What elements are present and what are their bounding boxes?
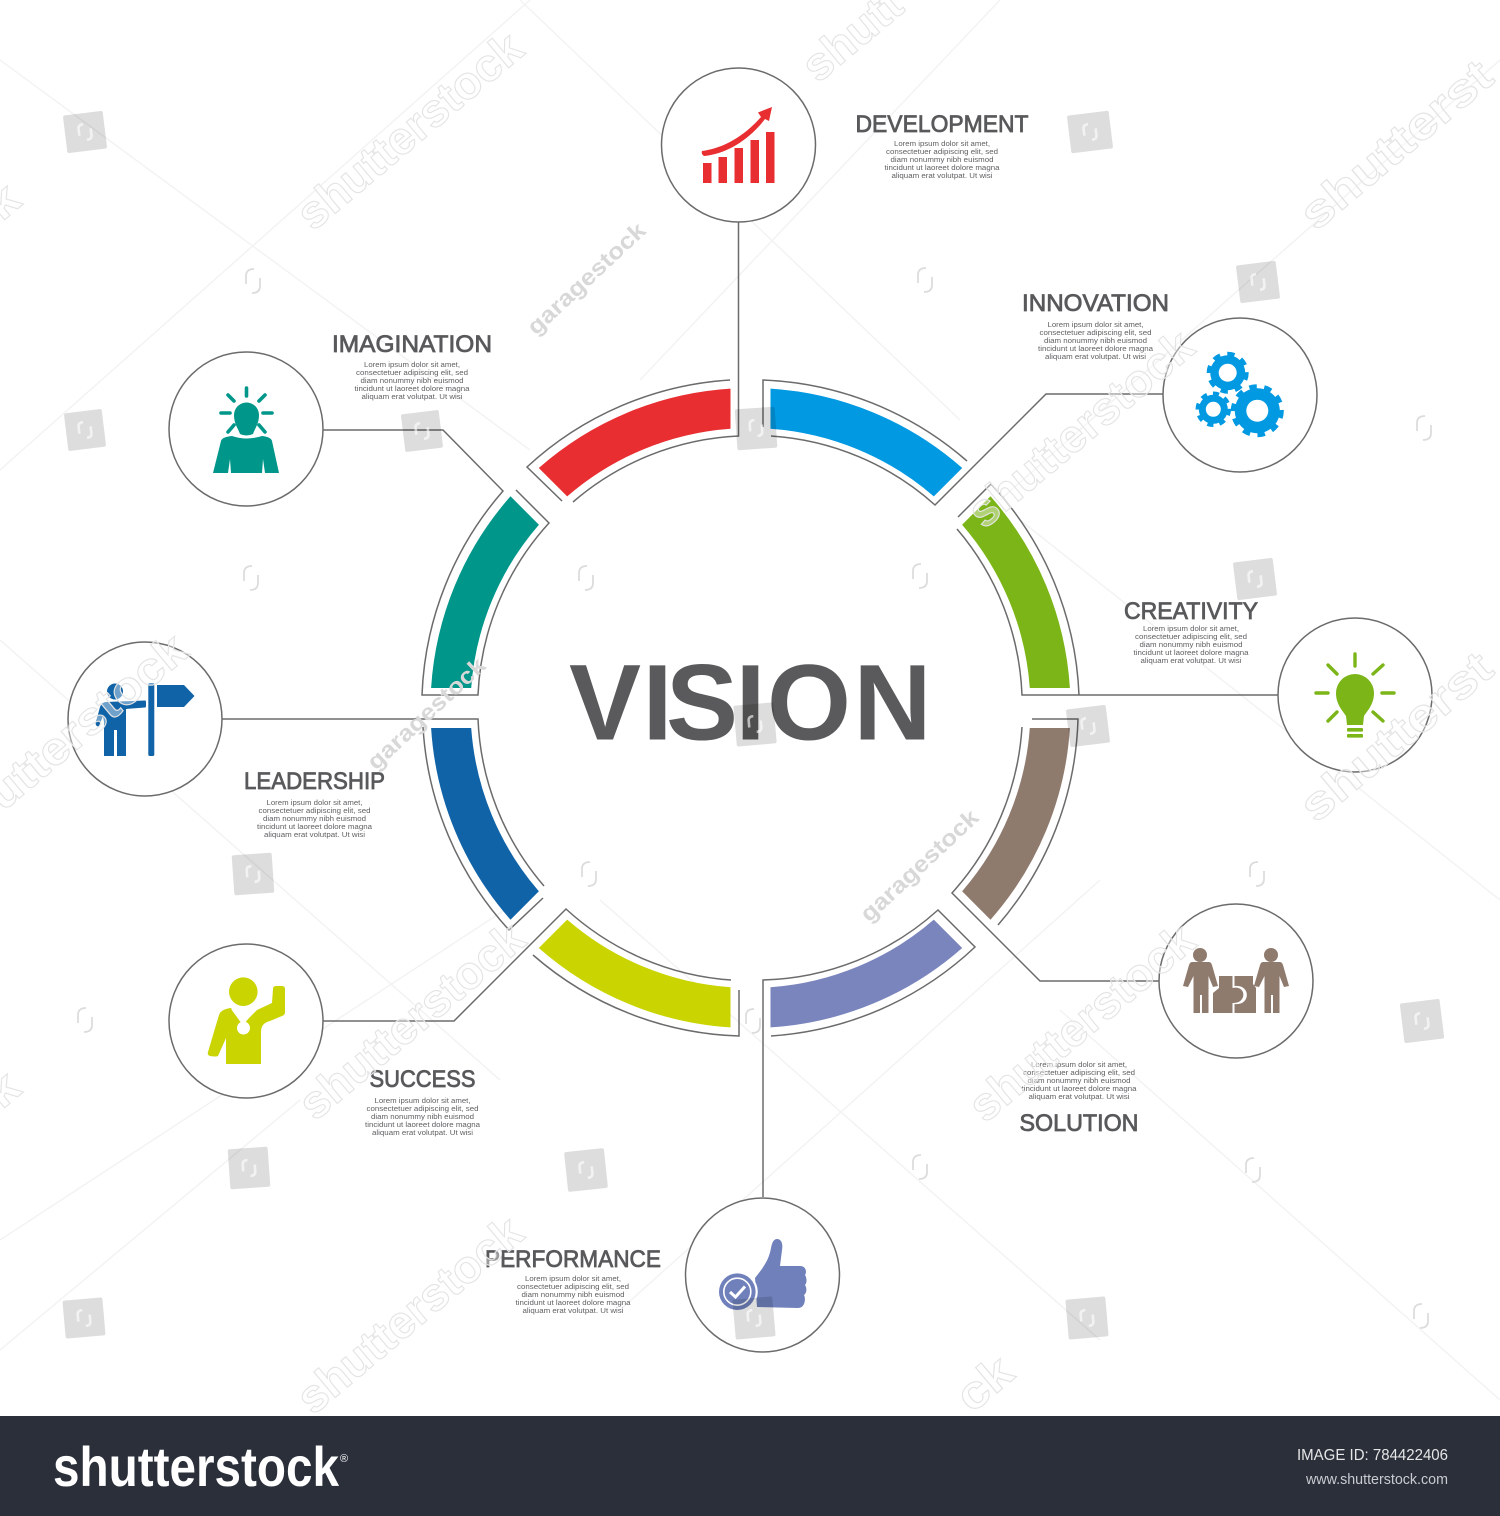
connector: performance [763, 910, 975, 1197]
heading: PERFORMANCE [485, 1246, 661, 1273]
body text: tincidunt ut laoreet dolore magna [1022, 1084, 1137, 1093]
body text: Lorem ipsum dolor sit amet, [364, 360, 460, 369]
body text: aliquam erat volutpat. Ut wisi [1045, 352, 1146, 361]
body text [1022, 1060, 1137, 1101]
icon circle: gears [1163, 318, 1317, 472]
registered mark: ® [340, 1453, 348, 1465]
website: www.shutterstock.com [1305, 1471, 1448, 1488]
item: leadership [68, 642, 385, 839]
body text: Lorem ipsum dolor sit amet, [1143, 624, 1239, 633]
segment: performance (periwinkle) [770, 920, 962, 1027]
body text: Lorem ipsum dolor sit amet, [525, 1274, 621, 1283]
segment: creativity (green) [962, 496, 1070, 688]
body text: Lorem ipsum dolor sit amet, [894, 139, 990, 148]
segment: success (lime) [539, 920, 730, 1027]
item: development [662, 68, 1029, 222]
body text [365, 1096, 481, 1137]
body text: diam nonummy nibh euismod [1140, 640, 1242, 649]
watermark: shutterstock diagonal text: ck [945, 1344, 1023, 1422]
body text [1038, 320, 1154, 361]
body text: aliquam erat volutpat. Ut wisi [522, 1306, 624, 1315]
body text: tincidunt ut laoreet dolore magna [884, 163, 1000, 172]
item: success [169, 944, 481, 1137]
watermark: shutterstock diagonal text: shutterstock [286, 1205, 533, 1424]
heading: SOLUTION [1020, 1110, 1138, 1137]
watermark: shutterstock diagonal text: shutterstock [288, 911, 535, 1130]
connector: success [323, 909, 739, 1036]
body text: consectetuer adipiscing elit, sed [356, 368, 468, 377]
segment: innovation (blue) [770, 389, 962, 496]
centre title: VISION: VISION [569, 642, 932, 762]
icon circle: thumbs up with check badge [686, 1198, 840, 1352]
icon circle: person pointing at signpost [68, 642, 222, 796]
segment: solution (brown) [962, 728, 1070, 920]
body text: consectetuer adipiscing elit, sed [1135, 632, 1247, 641]
icon circle: person with medal [169, 944, 323, 1098]
body text: Lorem ipsum dolor sit amet, [374, 1096, 470, 1105]
body text [884, 139, 1000, 180]
body text: Lorem ipsum dolor sit amet, [266, 798, 362, 807]
watermark: shutterstock diagonal text: shutterstock [958, 913, 1205, 1132]
item: innovation [1022, 290, 1317, 472]
item: imagination [169, 331, 492, 506]
item: performance [485, 1198, 840, 1352]
body text: aliquam erat volutpat. Ut wisi [892, 171, 993, 180]
watermark: garagestock diagonal text: garagestock [362, 652, 491, 775]
body text: diam nonummy nibh euismod [522, 1290, 624, 1299]
body text: aliquam erat volutpat. Ut wisi [372, 1128, 473, 1137]
watermark: garagestock diagonal text: garagestock [855, 804, 984, 927]
body text: diam nonummy nibh euismod [1028, 1076, 1130, 1085]
segment: leadership (dark blue) [431, 728, 539, 920]
icon circle: two people with puzzle [1159, 904, 1313, 1058]
heading: DEVELOPMENT [856, 111, 1029, 138]
body text: Lorem ipsum dolor sit amet, [1031, 1060, 1127, 1069]
connector: solution [952, 719, 1159, 981]
watermark: shutterstock diagonal text: shutterstock [286, 21, 533, 240]
connector: creativity [957, 484, 1278, 695]
watermark: garagestock diagonal text: garagestock [522, 217, 651, 340]
body text: tincidunt ut laoreet dolore magna [1134, 648, 1249, 657]
watermark: grey logo squares [62, 111, 1444, 1340]
footer logo: shutterstock [53, 1435, 340, 1498]
connector: development [527, 220, 738, 502]
body text: aliquam erat volutpat. Ut wisi [1140, 656, 1242, 665]
connector: innovation [763, 380, 1163, 505]
icon circle: person with bulb head [169, 352, 323, 506]
body text: diam nonummy nibh euismod [360, 376, 464, 385]
watermark: shutterstock diagonal text: shutterst [1289, 49, 1500, 240]
body text: tincidunt ut laoreet dolore magna [365, 1120, 481, 1129]
body text: diam nonummy nibh euismod [371, 1112, 474, 1121]
body text: aliquam erat volutpat. Ut wisi [362, 392, 463, 401]
body text: consectetuer adipiscing elit, sed [366, 1104, 478, 1113]
body text: diam nonummy nibh euismod [1044, 336, 1147, 345]
body text: diam nonummy nibh euismod [263, 814, 366, 823]
watermark: shutterstock diagonal text: shutterstock [957, 319, 1204, 538]
body text: consectetuer adipiscing elit, sed [258, 806, 370, 815]
segment: imagination (teal) [431, 496, 539, 688]
segment: development (red) [539, 389, 730, 496]
body text: consectetuer adipiscing elit, sed [1023, 1068, 1135, 1077]
image id: IMAGE ID: 784422406 [1297, 1447, 1448, 1464]
heading: CREATIVITY [1124, 598, 1258, 625]
segment outlines and connector lines [222, 220, 1278, 1197]
heading: SUCCESS [370, 1066, 476, 1093]
body text [1134, 624, 1249, 665]
connector: imagination [323, 430, 549, 695]
body text: consectetuer adipiscing elit, sed [1040, 328, 1152, 337]
body text: tincidunt ut laoreet dolore magna [516, 1298, 631, 1307]
ring of eight coloured segments [431, 389, 1070, 1027]
footer bar [0, 1416, 1500, 1516]
body text: tincidunt ut laoreet dolore magna [354, 384, 470, 393]
body text: tincidunt ut laoreet dolore magna [1038, 344, 1154, 353]
body text: tincidunt ut laoreet dolore magna [257, 822, 373, 831]
icon circle: rising bar chart [662, 68, 816, 222]
body text: Lorem ipsum dolor sit amet, [1048, 320, 1144, 329]
item: creativity [1124, 598, 1432, 772]
body text: consectetuer adipiscing elit, sed [886, 147, 998, 156]
icon circle: light bulb [1278, 618, 1432, 772]
watermark: garagestock diagonal text [362, 217, 984, 927]
body text: diam nonummy nibh euismod [890, 155, 994, 164]
body text: aliquam erat volutpat. Ut wisi [1028, 1092, 1130, 1101]
body text [257, 798, 373, 839]
item: solution [1020, 904, 1313, 1137]
heading: LEADERSHIP [244, 768, 385, 795]
watermark: shutterstock diagonal text: shutterst [1289, 641, 1500, 832]
body text: consectetuer adipiscing elit, sed [517, 1282, 629, 1291]
connector: leadership [222, 719, 544, 930]
body text: aliquam erat volutpat. Ut wisi [264, 830, 365, 839]
body text [516, 1274, 631, 1315]
heading: INNOVATION [1022, 290, 1169, 317]
watermark: small outlined logo marks [78, 268, 1431, 1328]
heading: IMAGINATION [332, 331, 492, 358]
body text [354, 360, 470, 401]
